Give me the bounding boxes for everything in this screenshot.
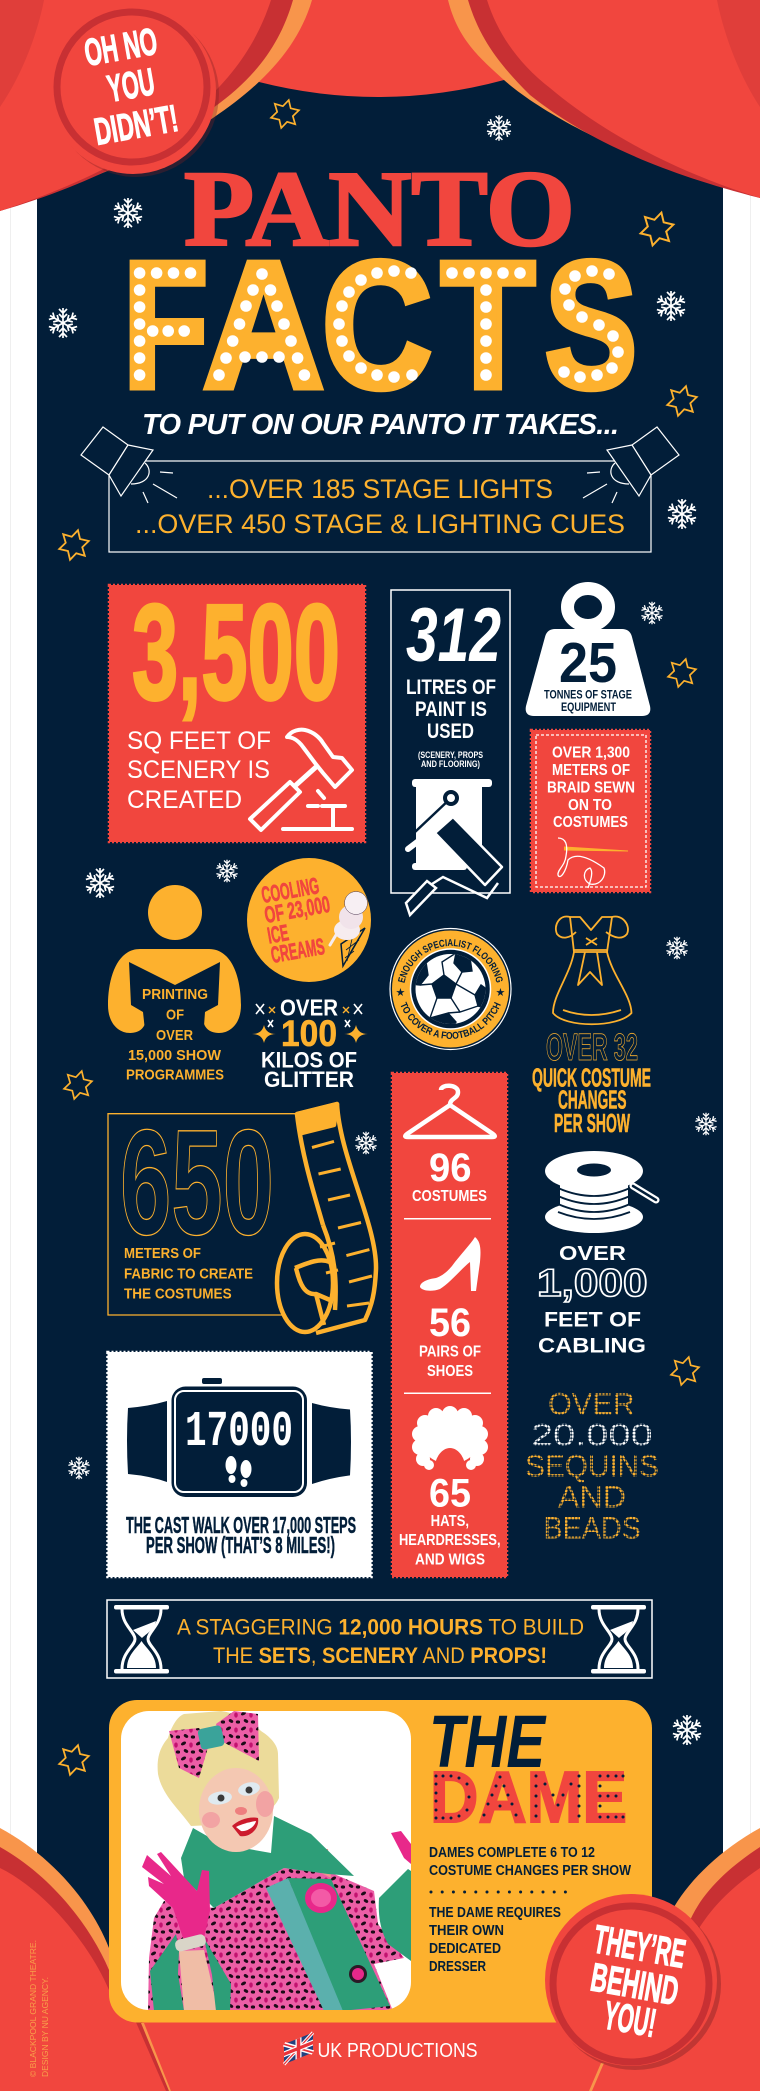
panel: printing programmes person reading: PRINTING	[142, 986, 208, 1003]
text: over 32 quick costume changes: CHANGES	[558, 1085, 626, 1115]
badge: specialist flooring football: ★	[396, 987, 406, 999]
bottom stage curtains	[0, 1828, 760, 2091]
panel: cooling ice creams circle	[247, 858, 371, 982]
top stage curtains	[0, 0, 760, 211]
panel: cooling ice creams circle: ICE	[265, 919, 291, 948]
panel: 3,500 sq feet of scenery	[109, 576, 365, 842]
panel: costumes shoes wigs strip: SHOES	[427, 1363, 473, 1380]
credit: copyright vertical text: © BLACKPOOL GRAND THEATRE.	[28, 1940, 38, 2077]
icon: hammer and nail	[250, 730, 352, 830]
text: over 100 kilos of glitter: OVER	[280, 995, 338, 1021]
badge: oh no you didn't: YOU	[104, 61, 158, 111]
logo: uk productions: UK PRODUCTIONS	[318, 2040, 478, 2062]
text: over 32 quick costume changes	[532, 1027, 651, 1138]
text: over 1,000 feet of cabling: 1,000	[537, 1262, 648, 1305]
icon: sparkles	[252, 1004, 368, 1064]
credit: copyright vertical text: DESIGN BY NU AGENCY.	[40, 1977, 50, 2077]
icon: dress outline	[553, 916, 632, 1024]
title: FACTS with marquee bulbs: A	[203, 225, 324, 426]
heading: the dame: DAME	[430, 1758, 627, 1838]
glitter trim	[266, 1878, 343, 2011]
panel: 312 litres of paint: USED	[427, 720, 474, 743]
panel: 1,300 meters of braid: METERS OF	[552, 762, 630, 779]
badge: specialist flooring football: ENOUGH SPECIALIST FLOORING	[398, 939, 503, 983]
panel: 650 meters of fabric: FABRIC TO CREATE	[124, 1267, 253, 1283]
title: FACTS with marquee bulbs: S	[545, 225, 637, 426]
text: costume changes: COSTUME CHANGES PER SHOW	[429, 1863, 631, 1879]
icon: union flag	[284, 2033, 313, 2064]
text: over 1,000 feet of cabling	[537, 1243, 648, 1358]
panel: cooling ice creams circle: COOLING	[259, 872, 321, 908]
text: over 20,000 sequins and beads: 20.000	[531, 1417, 653, 1453]
icon: smartwatch: 17000	[185, 1404, 293, 1461]
panel: stage lights banner	[81, 427, 679, 552]
panel: 3,500 sq feet of scenery: SCENERY IS	[127, 756, 270, 784]
title: PANTO: PANTO	[184, 150, 575, 269]
text: over 1,000 feet of cabling: OVER	[559, 1243, 627, 1265]
title: FACTS with marquee bulbs: T	[441, 225, 535, 426]
coat buttons	[305, 1883, 337, 1913]
panel: 17,000 steps smartwatch	[108, 1352, 372, 1577]
icon: 25 tonnes weight	[526, 588, 650, 716]
icon: left hourglass	[114, 1605, 169, 1674]
heading: the dame	[429, 1700, 627, 1838]
icon: needle and thread	[558, 838, 628, 888]
panel: the dame	[109, 1700, 652, 2022]
panel: costumes shoes wigs strip: PAIRS OF	[419, 1343, 481, 1360]
panel: 3,500 sq feet of scenery: SQ FEET OF	[127, 727, 271, 755]
coat	[148, 1868, 404, 2011]
text: over 32 quick costume changes: QUICK COSTUME	[532, 1063, 651, 1093]
panel: 312 litres of paint: LITRES OF	[406, 676, 496, 699]
text: over 20,000 sequins and beads: OVER	[548, 1386, 635, 1422]
text: over 20,000 sequins and beads: SEQUINS	[525, 1447, 659, 1483]
panel: printing programmes person reading	[108, 885, 241, 1084]
panel: 17,000 steps smartwatch: THE CAST WALK OVER 17,000 STEPS	[126, 1512, 356, 1538]
text: over 100 kilos of glitter: KILOS OF	[261, 1048, 357, 1073]
hair bow	[169, 1728, 209, 1778]
panel: stage lights banner: ...OVER 185 STAGE LIGHTS	[207, 474, 553, 504]
heading: the dame: THE	[429, 1700, 547, 1783]
icon: right hourglass	[591, 1605, 646, 1674]
panel: costumes shoes wigs strip: AND WIGS	[415, 1552, 485, 1569]
panel: 312 litres of paint	[391, 590, 510, 915]
icon: high heel shoe	[420, 1237, 480, 1291]
bracelet	[175, 1934, 206, 1952]
panel: 12,000 hours banner	[107, 1600, 652, 1678]
text: over 100 kilos of glitter: 100	[281, 1013, 337, 1054]
icon: cable spool	[545, 1151, 656, 1233]
panel: 17,000 steps smartwatch: PER SHOW (THAT’S 8 MILES!)	[146, 1532, 335, 1558]
panel: stage lights banner: ...OVER 450 STAGE & LIGHTING CUES	[135, 509, 625, 539]
panel: cooling ice creams circle: CREAMS	[269, 933, 327, 968]
panel: 1,300 meters of braid: ON TO	[568, 797, 612, 814]
icon: football	[416, 954, 486, 1024]
icon: curly wig	[412, 1406, 488, 1496]
icon: tape measure	[277, 1104, 376, 1333]
icon: 25 tonnes weight: TONNES OF STAGE	[544, 690, 632, 702]
panel: 1,300 meters of braid: BRAID SEWN	[547, 780, 635, 796]
text: over 32 quick costume changes: PER SHOW	[554, 1108, 630, 1138]
panel: costumes shoes wigs strip	[392, 1073, 507, 1577]
title: FACTS with marquee bulbs	[123, 225, 637, 426]
photo: the dame in costume	[121, 1711, 411, 2011]
icon: 25 tonnes weight: EQUIPMENT	[561, 702, 616, 714]
panel: printing programmes person reading: 15,000 SHOW	[128, 1047, 222, 1064]
text: costume changes	[429, 1845, 631, 1879]
text: over 32 quick costume changes: OVER 32	[546, 1027, 638, 1069]
panel: printing programmes person reading: PROGRAMMES	[126, 1066, 224, 1084]
icon: smartwatch	[127, 1378, 351, 1497]
title: FACTS with marquee bulbs: F	[123, 225, 208, 426]
panel: cooling ice creams circle: OF 23,000	[262, 891, 332, 928]
panel: costumes shoes wigs strip: HATS,	[431, 1513, 469, 1530]
green coat front	[288, 1878, 390, 2011]
panel: 312 litres of paint: (SCENERY, PROPS	[418, 750, 483, 760]
text: costume changes: DAMES COMPLETE 6 TO 12	[429, 1845, 595, 1861]
panel: costumes shoes wigs strip: 56	[429, 1301, 471, 1345]
panel: printing programmes person reading: OVER	[156, 1027, 193, 1044]
badge: specialist flooring football: ★	[496, 987, 506, 999]
right cuff	[379, 1869, 411, 1961]
badge: they're behind you: BEHIND	[587, 1956, 682, 2014]
inner sleeve fur	[204, 1938, 231, 2011]
text: over 20,000 sequins and beads: AND	[558, 1478, 626, 1514]
hair	[158, 1711, 279, 1826]
icon: left spotlight	[81, 427, 177, 503]
badge: they're behind you: YOU!	[600, 1994, 659, 2046]
badge: oh no you didn't: OH NO	[81, 21, 160, 75]
panel: costumes shoes wigs strip: 96	[429, 1146, 472, 1190]
text: dedicated dresser: THEIR OWN	[429, 1923, 504, 1939]
snowflakes and stars scattered on the panel	[48, 100, 717, 1775]
left glove	[142, 1852, 210, 1941]
text: over 1,000 feet of cabling: FEET OF	[544, 1309, 641, 1332]
badge: they're behind you	[545, 1894, 721, 2070]
panel: 3,500 sq feet of scenery: 3,500	[132, 576, 340, 728]
badge: specialist flooring football	[389, 928, 512, 1050]
panel: printing programmes person reading: OF	[166, 1007, 184, 1024]
panel: 1,300 meters of braid	[531, 730, 650, 892]
icon: ice cream cone	[330, 892, 368, 966]
right hand	[391, 1831, 411, 1864]
badge: specialist flooring football: TO COVER A FOOTBALL PITCH	[400, 1002, 501, 1039]
panel: 650 meters of fabric: METERS OF	[124, 1246, 201, 1262]
text: dedicated dresser	[429, 1905, 561, 1975]
panel: 3,500 sq feet of scenery: CREATED	[127, 786, 242, 814]
panel: costumes shoes wigs strip: HEARDRESSES,	[399, 1532, 501, 1549]
panel: 650 meters of fabric: THE COSTUMES	[124, 1287, 232, 1303]
panel: 12,000 hours banner: A STAGGERING 12,000 HOURS TO BUILD	[177, 1614, 584, 1640]
panel: 1,300 meters of braid: OVER 1,300	[552, 745, 630, 762]
panel: costumes shoes wigs strip: COSTUMES	[412, 1188, 487, 1205]
text: dedicated dresser: DEDICATED	[429, 1941, 501, 1957]
icon: right spotlight	[583, 427, 679, 503]
credit: copyright vertical text	[28, 1940, 50, 2077]
pink shirt	[322, 1849, 331, 1878]
panel: 650 meters of fabric	[108, 1098, 376, 1333]
fur collar	[181, 1816, 354, 1908]
badge: oh no you didn't	[50, 8, 219, 177]
text: over 20,000 sequins and beads	[525, 1386, 659, 1546]
text: over 1,000 feet of cabling: CABLING	[538, 1335, 646, 1358]
face	[199, 1768, 273, 1852]
panel: 312 litres of paint: PAINT IS	[415, 698, 487, 721]
text: over 100 kilos of glitter	[252, 995, 368, 1092]
icon: coat hanger	[405, 1086, 495, 1137]
lower left arm	[179, 1950, 218, 2011]
panel: 1,300 meters of braid: COSTUMES	[553, 814, 628, 831]
icon: paint tin and roller	[406, 779, 502, 915]
subtitle: TO PUT ON OUR PANTO IT TAKES...	[142, 409, 619, 441]
panel: 312 litres of paint: 312	[406, 593, 501, 678]
panel: 650 meters of fabric: 650	[120, 1098, 274, 1266]
logo: uk productions	[284, 2033, 478, 2064]
badge: oh no you didn't: DIDN’T!	[91, 98, 181, 154]
left sleeve fur	[150, 1934, 184, 2011]
panel: costumes shoes wigs strip: 65	[429, 1472, 471, 1516]
text: over 20,000 sequins and beads: BEADS	[544, 1510, 641, 1546]
text: over 100 kilos of glitter: GLITTER	[264, 1067, 354, 1092]
text: dedicated dresser: THE DAME REQUIRES	[429, 1905, 561, 1921]
icon: 25 tonnes weight: 25	[559, 631, 617, 695]
panel: 312 litres of paint: AND FLOORING)	[421, 759, 480, 769]
text: dedicated dresser: DRESSER	[429, 1959, 486, 1975]
title: FACTS with marquee bulbs: C	[322, 225, 432, 426]
panel: 12,000 hours banner: THE SETS, SCENERY AND PROPS!	[213, 1643, 547, 1668]
